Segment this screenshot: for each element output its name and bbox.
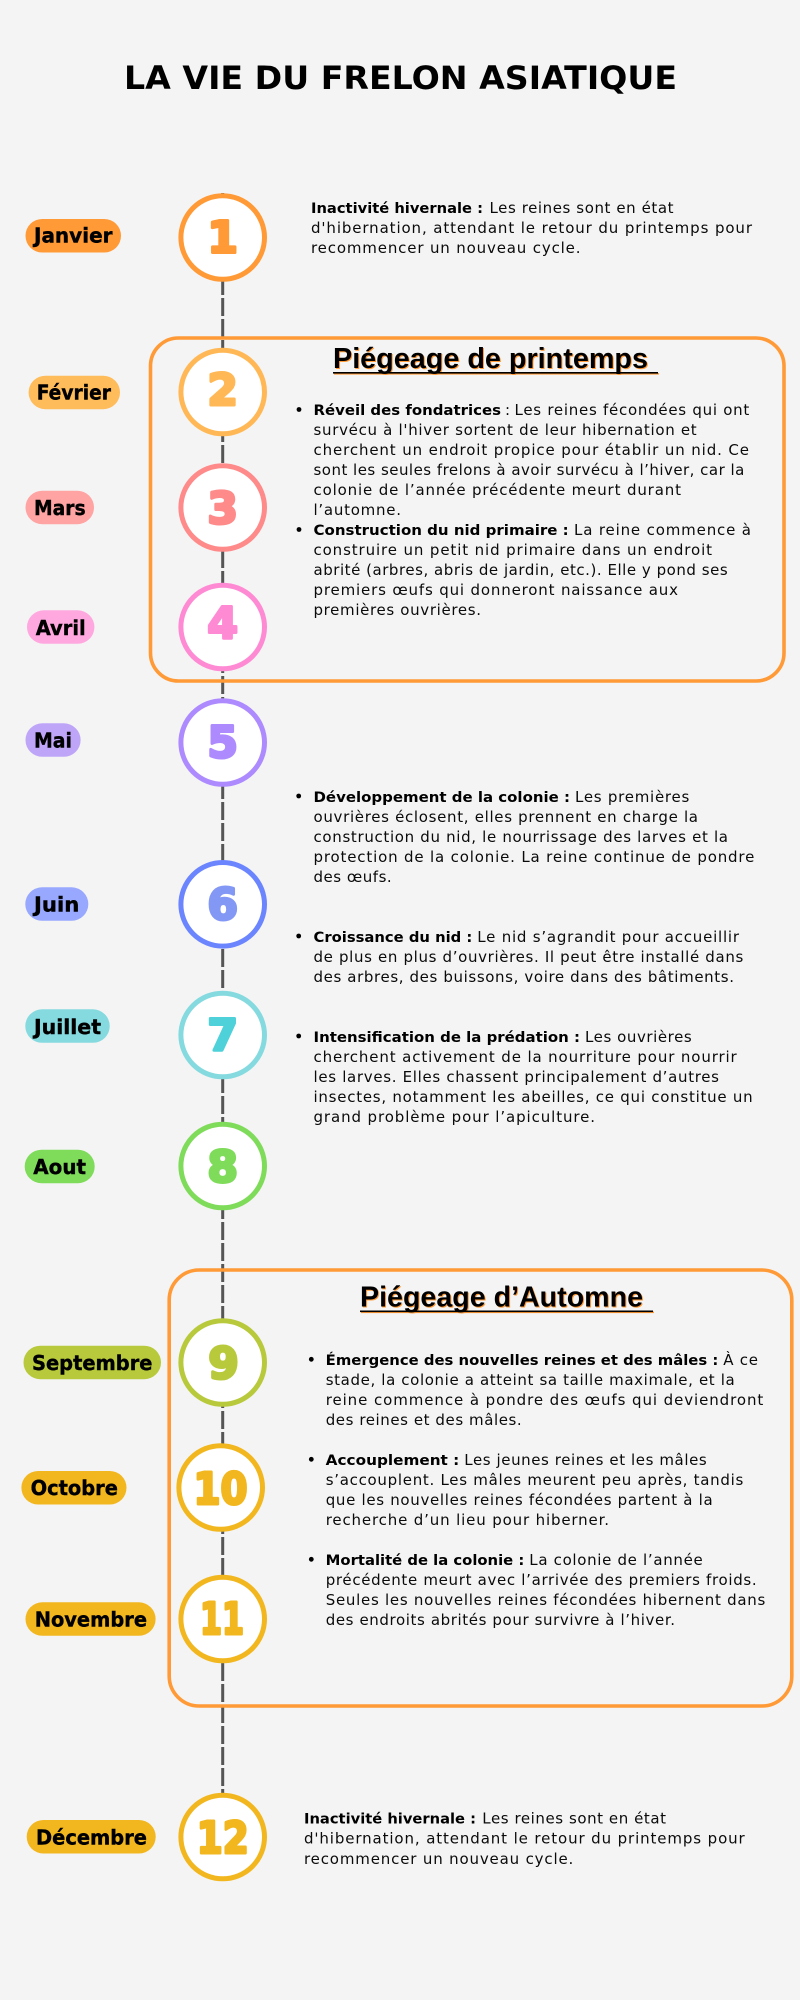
text: réveil des fondatrices: cherchent un endroit propice pour établir un nid. Ce xyxy=(314,441,749,459)
text: émergence: stade, la colonie a atteint sa taille maximale, et la xyxy=(326,1371,735,1389)
text: accouplement: que les nouvelles reines fécondées partent à la xyxy=(326,1491,713,1509)
text: mortalité de la colonie: Seules les nouvelles reines fécondées hibernent dans xyxy=(326,1591,765,1609)
circle 6 xyxy=(181,862,264,946)
text: accouplement: Accouplement : xyxy=(326,1453,459,1469)
text: accouplement xyxy=(309,1451,743,1529)
circle 1: 1 xyxy=(207,212,238,264)
text: intensification de la prédation: Intensification de la prédation : xyxy=(314,1030,580,1046)
pill: décembre xyxy=(27,1820,156,1854)
text: émergence: reine commence à pondre des œufs qui deviendront xyxy=(326,1391,763,1409)
text: décembre: recommencer un nouveau cycle. xyxy=(304,1850,573,1868)
pill: aout: Aout xyxy=(33,1155,86,1179)
circle 12 xyxy=(181,1795,264,1879)
text: intensification de la prédation: insectes, notamment les abeilles, ce qui constitue un xyxy=(314,1088,753,1106)
text: décembre: d'hibernation, attendant le retour du printemps pour xyxy=(304,1830,746,1848)
circle 6: 6 xyxy=(207,880,238,930)
circle 3 xyxy=(181,466,264,549)
text: croissance du nid xyxy=(296,928,743,986)
text: intensification de la prédation xyxy=(296,1028,753,1126)
text: mortalité de la colonie: des endroits abrités pour survivre à l’hiver. xyxy=(326,1611,675,1629)
text: construction du nid primaire: premiers œufs qui donneront naissance aux xyxy=(314,581,678,599)
text: réveil des fondatrices: : xyxy=(505,401,510,419)
pill: mai: Mai xyxy=(34,729,72,753)
text: émergence: des reines et des mâles. xyxy=(326,1411,522,1429)
circle 1 xyxy=(181,196,264,279)
text: croissance du nid: des arbres, des buissons, voire dans des bâtiments. xyxy=(314,968,734,986)
pill: octobre: Octobre xyxy=(31,1476,118,1500)
circle 11 xyxy=(181,1577,264,1661)
text: décembre xyxy=(304,1810,746,1868)
text: développement de la colonie: des œufs. xyxy=(314,868,392,886)
panel: piégeage d'automne xyxy=(169,1270,792,1706)
text: mortalité de la colonie: La colonie de l’année xyxy=(529,1551,703,1569)
circle 4 xyxy=(181,585,264,669)
circle 4: 4 xyxy=(207,598,238,650)
pill: septembre xyxy=(24,1346,161,1379)
circle 5: 5 xyxy=(207,718,238,768)
circle 8 xyxy=(181,1124,264,1208)
text: réveil des fondatrices: Réveil des fondatrices xyxy=(314,403,501,419)
text: intensification de la prédation: les larves. Elles chassent principalement d’autres xyxy=(314,1068,719,1086)
text: développement de la colonie: Développement de la colonie : xyxy=(314,790,570,806)
panel: janvier text: Inactivité hivernale : xyxy=(311,201,483,217)
pill: mars: Mars xyxy=(34,496,86,520)
text: développement de la colonie xyxy=(296,788,754,886)
text: mortalité de la colonie: précédente meurt avec l’arrivée des premiers froids. xyxy=(326,1571,757,1589)
heading: piégeage d'automne: Piégeage d’Automne xyxy=(360,1282,643,1314)
pill: mars xyxy=(26,491,94,524)
pill: mai xyxy=(26,723,81,757)
text: développement de la colonie: Les premières xyxy=(575,788,689,806)
pill: février: Février xyxy=(37,380,112,404)
pill: février xyxy=(29,376,120,409)
pill: juillet xyxy=(25,1009,110,1043)
text: mortalité de la colonie: Mortalité de la colonie : xyxy=(326,1553,524,1569)
pill: juin: Juin xyxy=(32,893,79,917)
text: intensification de la prédation: Les ouvrières xyxy=(585,1028,692,1046)
pill: novembre: Novembre xyxy=(35,1608,147,1632)
pill: juillet: Juillet xyxy=(32,1015,101,1039)
text: émergence xyxy=(309,1350,763,1429)
text: décembre: Les reines sont en état xyxy=(482,1810,666,1828)
text: intensification de la prédation: cherchent activement de la nourriture pour nourrir xyxy=(314,1048,738,1066)
text: réveil des fondatrices: survécu à l'hiver sortent de leur hibernation et xyxy=(314,421,697,439)
text: construction du nid primaire xyxy=(297,521,751,619)
text: construction du nid primaire: abrité (arbres, abris de jardin, etc.). Elle y pond ses xyxy=(314,561,728,579)
pill: aout xyxy=(25,1150,95,1183)
text: accouplement: recherche d’un lieu pour hiberner. xyxy=(326,1511,609,1529)
circle 3: 3 xyxy=(207,484,238,534)
circle 11: 11 xyxy=(200,1594,244,1645)
text: accouplement: s’accouplent. Les mâles meurent peu après, tandis xyxy=(326,1471,743,1489)
panel: piégeage de printemps xyxy=(150,338,784,681)
text: intensification de la prédation: grand problème pour l’apiculture. xyxy=(314,1108,595,1126)
pill: septembre: Septembre xyxy=(32,1351,152,1375)
pill: novembre xyxy=(26,1602,156,1636)
text: construction du nid primaire: construire un petit nid primaire dans un endroit xyxy=(314,541,712,559)
text: développement de la colonie: protection de la colonie. La reine continue de pondre xyxy=(314,848,754,866)
text: mortalité de la colonie xyxy=(309,1551,765,1629)
pill: janvier: Janvier xyxy=(32,224,113,248)
circle 10: 10 xyxy=(194,1464,248,1515)
text: développement de la colonie: ouvrières éclosent, elles prennent en charge la xyxy=(314,808,698,826)
pill: octobre xyxy=(21,1471,126,1504)
circle 8: 8 xyxy=(207,1142,238,1193)
pill: janvier xyxy=(26,219,121,252)
circle 9 xyxy=(181,1321,264,1404)
circle 2: 2 xyxy=(207,365,238,416)
text: réveil des fondatrices: sont les seules frelons à avoir survécu à l’hiver, car la xyxy=(314,461,744,479)
pill: avril: Avril xyxy=(36,616,86,640)
text: réveil des fondatrices: l’automne. xyxy=(314,501,401,519)
text: décembre: Inactivité hivernale : xyxy=(304,1812,476,1828)
heading: piégeage de printemps: Piégeage de printemps xyxy=(333,343,648,375)
title: LA VIE DU FRELON ASIATIQUE xyxy=(124,59,677,97)
circle 5 xyxy=(181,701,264,784)
text: réveil des fondatrices: colonie de l’année précédente meurt durant xyxy=(314,481,681,499)
text: construction du nid primaire: premières ouvrières. xyxy=(314,601,481,619)
text: croissance du nid: de plus en plus d’ouvrières. Il peut être installé dans xyxy=(314,948,743,966)
pill: décembre: Décembre xyxy=(36,1825,147,1849)
text: accouplement: Les jeunes reines et les mâles xyxy=(464,1451,707,1469)
timeline dashed line xyxy=(221,193,224,1880)
pill: avril xyxy=(27,610,94,644)
text: croissance du nid: Croissance du nid : xyxy=(314,930,472,946)
pill: juin xyxy=(25,887,88,921)
text: émergence: Émergence des nouvelles reines et des mâles : xyxy=(326,1352,718,1369)
panel: janvier text: recommencer un nouveau cycle. xyxy=(311,239,580,257)
text: croissance du nid: Le nid s’agrandit pour accueillir xyxy=(477,928,740,946)
circle 7 xyxy=(181,993,264,1077)
panel: janvier text: Les reines sont en état xyxy=(490,199,674,217)
text: construction du nid primaire: Construction du nid primaire : xyxy=(314,523,569,539)
circle 2 xyxy=(181,350,264,434)
circle 10 xyxy=(179,1446,262,1529)
text: construction du nid primaire: La reine commence à xyxy=(574,521,751,539)
circle 12: 12 xyxy=(197,1813,249,1864)
circle 7: 7 xyxy=(207,1010,238,1062)
circle 9: 9 xyxy=(208,1338,239,1390)
text: développement de la colonie: construction du nid, le nourrissage des larves et la xyxy=(314,828,728,846)
text: réveil des fondatrices xyxy=(297,401,749,519)
text: réveil des fondatrices: Les reines fécondées qui ont xyxy=(514,401,749,419)
text: émergence: À ce xyxy=(723,1350,758,1369)
panel: janvier text: d'hibernation, attendant le retour du printemps pour xyxy=(311,219,753,237)
panel: janvier text xyxy=(311,199,753,257)
